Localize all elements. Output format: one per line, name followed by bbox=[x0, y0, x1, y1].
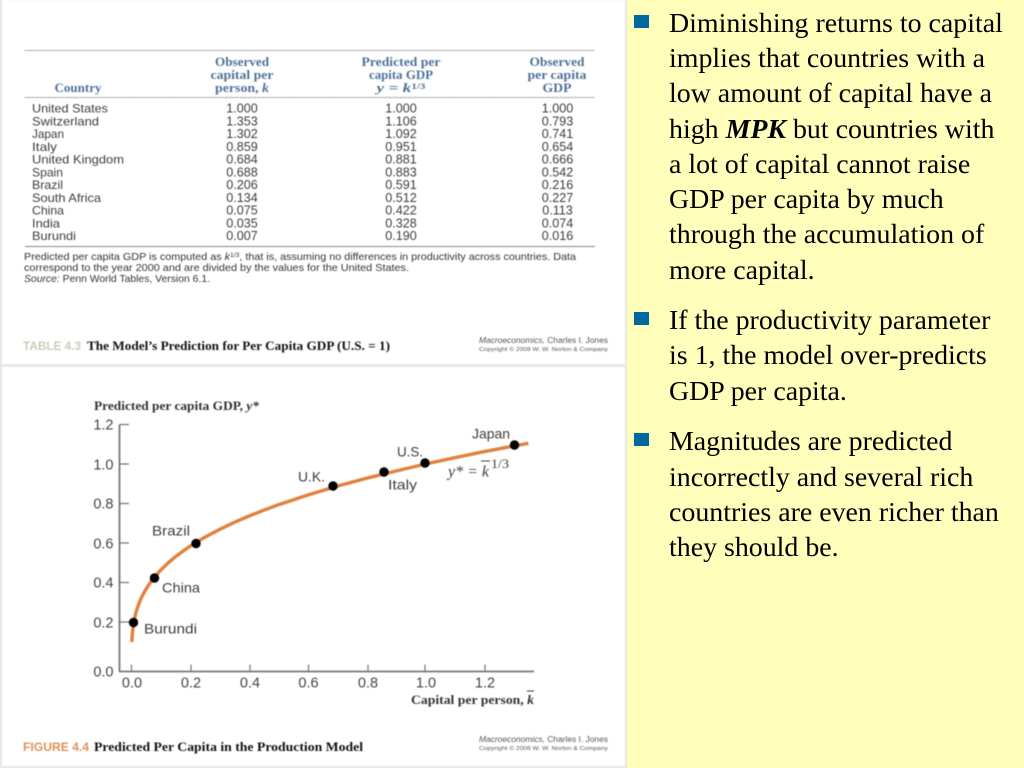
column: observed per capita GDP: 1.000 bbox=[542, 102, 573, 116]
country names: India bbox=[32, 216, 60, 230]
column: observed capital per person: 0.688 bbox=[226, 166, 258, 180]
column: predicted per capita GDP: 0.190 bbox=[385, 229, 417, 243]
y axis labels: 1.0 bbox=[93, 458, 114, 474]
point labels: Burundi bbox=[144, 620, 197, 636]
x axis labels: 1.0 bbox=[416, 676, 436, 692]
bullet 1: a lot of capital cannot raise bbox=[669, 149, 970, 180]
point labels bbox=[144, 426, 510, 636]
column: observed capital per person: 0.007 bbox=[226, 229, 258, 243]
table caption: The Model’s Prediction for Per Capita GDP (U.S. = 1) bbox=[87, 338, 390, 353]
column: observed capital per person: 0.075 bbox=[226, 204, 258, 218]
point labels: U.S. bbox=[397, 444, 423, 460]
x axis labels: 1.2 bbox=[475, 676, 495, 692]
country names: Switzerland bbox=[32, 114, 99, 128]
table footnote bbox=[24, 252, 576, 285]
x axis title: Capital per person, k bbox=[411, 693, 535, 707]
country names: China bbox=[32, 204, 64, 218]
curve equation: 1/3 bbox=[491, 456, 509, 471]
bullet 2: If the productivity parameter bbox=[669, 305, 990, 336]
bullet 1: Diminishing returns to capital bbox=[669, 8, 1003, 39]
column: observed per capita GDP: 0.793 bbox=[542, 114, 573, 128]
column: observed capital per person: 1.353 bbox=[226, 114, 258, 128]
bullet 2 bbox=[634, 305, 990, 407]
point labels: Brazil bbox=[152, 522, 190, 538]
column: observed per capita GDP bbox=[542, 102, 573, 243]
column: observed per capita GDP: 0.216 bbox=[542, 178, 573, 192]
bullet 1: GDP per capita by much bbox=[669, 184, 944, 215]
country names: Japan bbox=[32, 127, 64, 141]
column: predicted per capita GDP: 0.883 bbox=[385, 166, 417, 180]
column: observed capital per person: 1.302 bbox=[226, 127, 258, 141]
point labels: U.K. bbox=[298, 468, 325, 484]
curve equation: y* = k bbox=[446, 464, 490, 480]
y axis bbox=[120, 424, 129, 672]
column: observed capital per person: 0.035 bbox=[226, 216, 258, 230]
country names bbox=[32, 102, 124, 243]
point labels: Italy bbox=[388, 476, 417, 492]
country names: Burundi bbox=[32, 229, 76, 243]
column: observed per capita GDP: 0.113 bbox=[542, 204, 573, 218]
table caption: TABLE 4.3 bbox=[23, 341, 81, 353]
table rows bbox=[32, 102, 573, 243]
bullet 1: implies that countries with a bbox=[669, 43, 985, 74]
column: predicted per capita GDP: 0.951 bbox=[385, 140, 417, 154]
x axis labels: 0.6 bbox=[298, 676, 319, 692]
column: observed capital per person: 0.206 bbox=[226, 178, 258, 192]
y axis labels: 1.2 bbox=[93, 418, 114, 434]
x axis labels: 0.2 bbox=[181, 676, 201, 692]
bullet 3 bbox=[634, 426, 999, 563]
point labels: China bbox=[162, 580, 200, 596]
table footnote: 1/3 bbox=[230, 252, 240, 259]
bullet 1: low amount of capital have a bbox=[669, 78, 992, 109]
table publisher credit: Macroeconomics, Charles I. Jones bbox=[479, 336, 608, 345]
y axis labels bbox=[93, 418, 114, 680]
bullet 1 bbox=[634, 8, 1003, 286]
data points bbox=[129, 440, 519, 627]
table column headers: Country bbox=[54, 81, 102, 95]
table footnote: Source: Penn World Tables, Version 6.1. bbox=[24, 274, 210, 285]
column: observed per capita GDP: 0.016 bbox=[542, 229, 573, 243]
column: predicted per capita GDP: 1.000 bbox=[385, 102, 417, 116]
column: observed capital per person bbox=[226, 102, 258, 243]
y axis title: Predicted per capita GDP, y* bbox=[94, 399, 260, 413]
column: observed capital per person: 0.859 bbox=[226, 140, 258, 154]
table footnote: correspond to the year 2000 and are divided by the values for the United States. bbox=[24, 263, 409, 274]
column: predicted per capita GDP: 0.881 bbox=[385, 152, 417, 166]
country names: South Africa bbox=[32, 191, 101, 205]
country names: Brazil bbox=[32, 178, 63, 192]
figure caption: Predicted Per Capita in the Production Model bbox=[94, 739, 363, 754]
column: observed capital per person: 1.000 bbox=[226, 102, 258, 116]
table column headers: capital per bbox=[210, 68, 274, 82]
table column headers: y = k bbox=[374, 81, 412, 95]
table column headers: per capita bbox=[528, 68, 587, 82]
column: observed per capita GDP: 0.666 bbox=[542, 152, 573, 166]
column: predicted per capita GDP: 1.106 bbox=[385, 114, 417, 128]
figure publisher credit: Copyright © 2008 W. W. Norton & Company bbox=[479, 745, 608, 752]
y axis labels: 0.0 bbox=[93, 664, 114, 680]
column: predicted per capita GDP: 0.591 bbox=[385, 178, 417, 192]
table footnote: Predicted per capita GDP is computed as k bbox=[24, 252, 230, 263]
column: observed per capita GDP: 0.542 bbox=[542, 166, 573, 180]
country names: Italy bbox=[32, 140, 57, 154]
column: observed capital per person: 0.134 bbox=[226, 191, 258, 205]
table publisher credit: Copyright © 2008 W. W. Norton & Company bbox=[479, 346, 608, 353]
bullet 3: they should be. bbox=[669, 532, 839, 563]
x axis labels bbox=[122, 676, 495, 692]
column: predicted per capita GDP: 0.512 bbox=[385, 191, 417, 205]
bullet 1: more capital. bbox=[669, 255, 815, 286]
table column headers: Observed bbox=[530, 55, 585, 69]
bullet 3: Magnitudes are predicted bbox=[669, 426, 952, 457]
table column headers: person, k bbox=[215, 81, 270, 95]
y axis labels: 0.2 bbox=[93, 616, 114, 632]
column: observed per capita GDP: 0.654 bbox=[542, 140, 573, 154]
figure publisher credit bbox=[479, 735, 608, 752]
column: observed per capita GDP: 0.741 bbox=[542, 127, 573, 141]
country names: Spain bbox=[32, 166, 63, 180]
table column headers: GDP bbox=[542, 81, 572, 95]
table column headers: Observed bbox=[215, 55, 269, 69]
table column headers: capita GDP bbox=[369, 68, 433, 82]
column: predicted per capita GDP: 0.422 bbox=[385, 204, 417, 218]
x axis labels: 0.0 bbox=[122, 676, 142, 692]
bullet 2: is 1, the model over-predicts bbox=[669, 340, 987, 371]
x axis labels: 0.8 bbox=[358, 676, 378, 692]
point labels: Japan bbox=[472, 426, 510, 442]
bullet 3: incorrectly and several rich bbox=[669, 462, 973, 493]
column: predicted per capita GDP bbox=[385, 102, 417, 243]
column: observed per capita GDP: 0.074 bbox=[542, 216, 573, 230]
column: observed capital per person: 0.684 bbox=[226, 152, 258, 166]
country names: United Kingdom bbox=[32, 152, 124, 166]
curve equation bbox=[446, 456, 509, 480]
bullet 1: high MPK but countries with bbox=[669, 114, 994, 145]
panel: table and chart figures bbox=[0, 0, 627, 768]
curve: y* = k^(1/3) bbox=[132, 443, 528, 642]
line chart: predicted per capita GDP bbox=[93, 399, 535, 707]
panel: explanatory bullet text bbox=[627, 0, 1024, 768]
x axis bbox=[119, 664, 534, 672]
table column headers: 1/3 bbox=[411, 82, 426, 91]
figure caption: FIGURE 4.4 bbox=[23, 742, 90, 754]
column: observed per capita GDP: 0.227 bbox=[542, 191, 573, 205]
table publisher credit bbox=[479, 336, 608, 353]
country names: United States bbox=[32, 102, 108, 116]
y axis labels: 0.4 bbox=[93, 576, 114, 592]
bullet 2: GDP per capita. bbox=[669, 376, 847, 407]
table column headers bbox=[54, 55, 587, 95]
table footnote: , that is, assuming no differences in productivity across countries. Data bbox=[239, 252, 576, 263]
figure publisher credit: Macroeconomics, Charles I. Jones bbox=[479, 735, 608, 744]
y axis labels: 0.6 bbox=[93, 536, 114, 552]
y axis labels: 0.8 bbox=[93, 496, 114, 512]
x axis labels: 0.4 bbox=[240, 676, 260, 692]
table column headers: Predicted per bbox=[362, 55, 441, 69]
bullet 3: countries are even richer than bbox=[669, 497, 999, 528]
column: predicted per capita GDP: 0.328 bbox=[385, 216, 417, 230]
bullet 1: through the accumulation of bbox=[669, 219, 984, 250]
column: predicted per capita GDP: 1.092 bbox=[385, 127, 417, 141]
